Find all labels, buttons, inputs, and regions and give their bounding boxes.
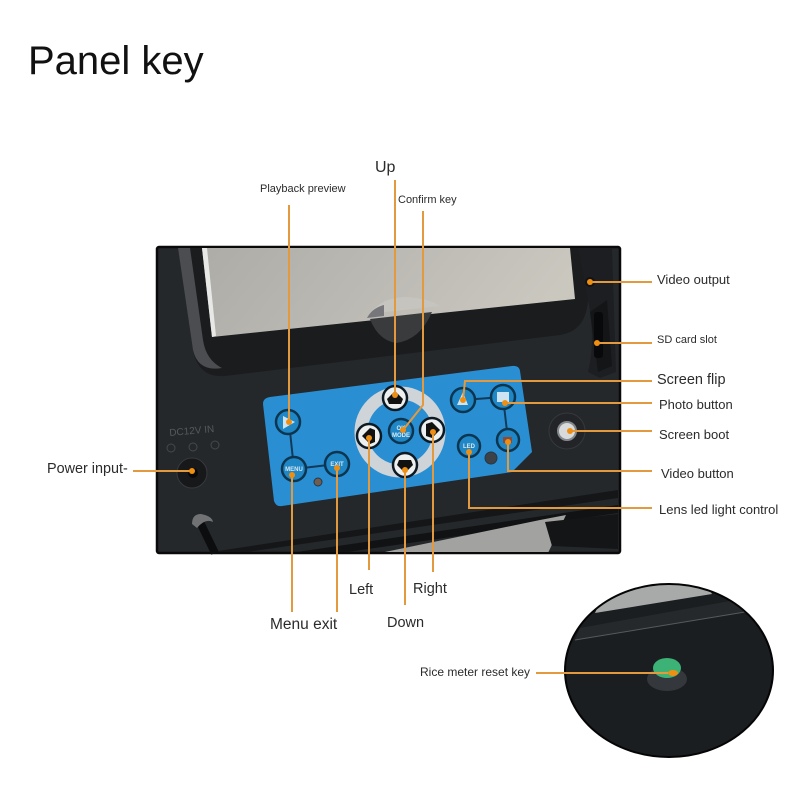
silkscreen text: DC12V IN	[169, 424, 215, 439]
screen bezel	[178, 248, 588, 376]
label: reset key: Rice meter reset key	[420, 665, 530, 679]
power jack	[177, 458, 207, 488]
button: video	[497, 429, 519, 451]
indicator right	[485, 452, 497, 464]
inset: reset key closeup	[565, 575, 773, 757]
button: exit	[325, 452, 349, 476]
label: video output: Video output	[657, 272, 730, 287]
button: left	[357, 424, 381, 448]
label: right: Right	[413, 581, 447, 597]
button: screen boot	[549, 413, 585, 449]
button: menu: MENU	[285, 467, 303, 473]
label: confirm key: Confirm key	[398, 194, 457, 206]
button: down	[393, 453, 417, 477]
label: screen flip: Screen flip	[657, 372, 726, 388]
label: left: Left	[349, 582, 373, 598]
title: Panel key	[28, 39, 204, 83]
reset button	[647, 667, 687, 691]
label: sd card slot: SD card slot	[657, 334, 717, 346]
button: play	[276, 410, 300, 434]
label: video button: Video button	[661, 466, 734, 481]
blue control plate	[263, 366, 532, 506]
right side port strip	[578, 248, 616, 378]
silkscreen symbols	[167, 441, 219, 452]
label: power input: Power input-	[47, 461, 128, 477]
cable grommet	[198, 518, 215, 553]
callout: reset key	[536, 672, 668, 674]
indicator left	[314, 478, 322, 486]
connectors	[289, 397, 508, 469]
d-pad ring	[361, 393, 439, 471]
screen reflection	[367, 297, 440, 343]
button: right	[420, 418, 444, 442]
button: menu	[282, 457, 306, 481]
callout lines	[133, 180, 652, 612]
button: flip	[451, 388, 475, 412]
button: up	[383, 386, 407, 410]
screen	[202, 248, 575, 337]
panel: device photo	[157, 247, 620, 553]
button: ok	[389, 419, 413, 443]
button: exit: EXIT	[330, 462, 344, 468]
label: lens led: Lens led light control	[659, 502, 778, 517]
label: playback preview: Playback preview	[260, 183, 346, 195]
button: photo	[491, 385, 515, 409]
button: led	[458, 435, 480, 457]
label: down: Down	[387, 615, 424, 631]
lower ridges	[205, 490, 618, 553]
button: ok: MODE	[392, 433, 410, 439]
label: screen boot: Screen boot	[659, 427, 729, 442]
button: ok: OK	[396, 426, 406, 432]
label: menu exit: Menu exit	[270, 616, 338, 633]
button: led: LED	[463, 444, 476, 450]
label: photo button: Photo button	[659, 397, 733, 412]
label: up: Up	[375, 159, 396, 176]
